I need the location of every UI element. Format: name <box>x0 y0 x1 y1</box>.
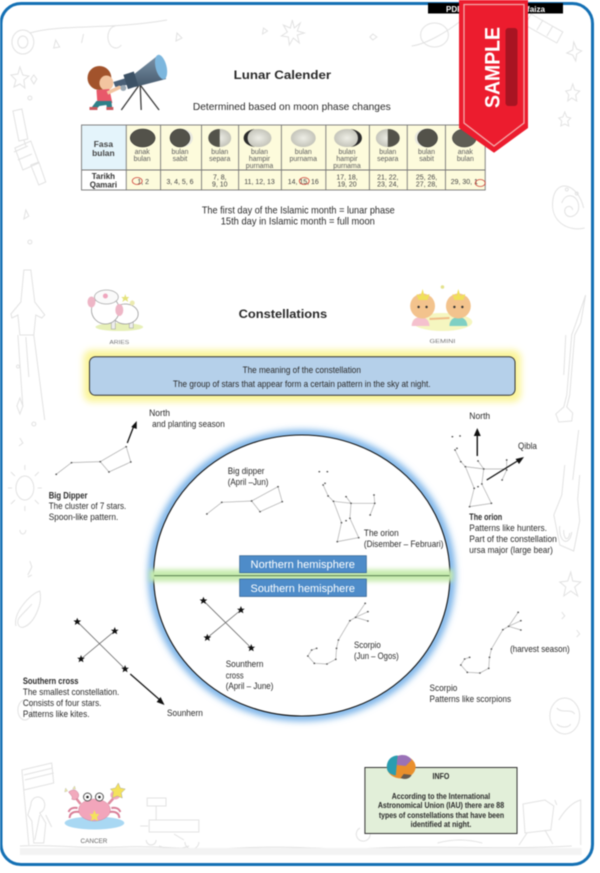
label: north and qibla <box>469 411 537 451</box>
label: Aries: ARIES <box>109 340 130 346</box>
dark red tag <box>506 28 518 106</box>
phase names: purnama <box>246 163 273 170</box>
text: first and fifteenth day <box>202 205 395 228</box>
phase names <box>134 149 474 170</box>
label: inner Southern cross: Sounthern <box>226 659 263 669</box>
diagram: celestial sphere <box>149 434 453 716</box>
label: inner Orion <box>364 528 443 549</box>
phase names: sabit <box>173 156 187 163</box>
text: Big Dipper description: The cluster of 7 stars. <box>49 501 126 511</box>
text: Southern cross description: Consists of four stars. <box>23 698 101 708</box>
phase names: bulan <box>251 149 268 156</box>
text: Southern cross description: Southern cross <box>23 676 79 686</box>
constellation: Southern cross inner <box>200 597 255 651</box>
lunar dates: 25, 26, <box>416 174 437 182</box>
phase names: hampir <box>249 156 271 163</box>
phase names: separa <box>377 156 399 163</box>
sample text: SAMPLE <box>482 27 504 108</box>
label: inner Big dipper <box>228 466 268 487</box>
sample ribbon <box>459 0 528 153</box>
table row label: Tarikh Qamari: Tarikh <box>92 172 115 181</box>
illustration: Gemini twins <box>410 285 472 331</box>
illustration: Cancer crab <box>65 783 125 830</box>
lunar dates: 1, 2 <box>137 179 149 186</box>
label: inner Scorpio: (Jun – Ogos) <box>354 651 399 661</box>
label: inner Scorpio <box>354 640 399 661</box>
label: north and planting season: and planting season <box>152 419 225 429</box>
text: Orion description <box>469 512 557 555</box>
lunar dates: 19, 20 <box>337 181 357 189</box>
arrow: north, Big Dipper <box>127 421 137 443</box>
text: Orion description: The orion <box>469 512 502 522</box>
constellation: Orion outer <box>451 435 508 507</box>
top black label bar <box>428 3 563 14</box>
lunar dates: 23, 24, <box>377 181 398 189</box>
lunar dates: 11, 12, 13 <box>244 179 275 186</box>
lunar dates: 21, 22, <box>377 174 398 182</box>
label: north and planting season <box>149 408 225 429</box>
text: Orion description: Part of the constellation <box>469 534 557 544</box>
constellation: Big Dipper inner <box>206 486 283 515</box>
info heading: INFO <box>433 772 449 781</box>
text: Orion description: Patterns like hunters. <box>469 523 547 533</box>
text: Scorpio description <box>430 683 512 704</box>
phase names: anak <box>135 149 150 156</box>
phase names: separa <box>209 156 230 163</box>
text: Orion description: ursa major (large bear) <box>469 545 553 555</box>
icon: brain <box>387 755 416 779</box>
label: inner Southern cross <box>226 659 273 691</box>
phase names: bulan <box>339 149 356 156</box>
label: Southern hemisphere <box>240 579 366 596</box>
label: inner Southern cross: cross <box>226 670 244 681</box>
text: Southern cross description: The smallest constellation. <box>23 687 119 697</box>
phase names: bulan <box>134 156 151 163</box>
moon phase icons <box>130 129 476 147</box>
phase names: bulan <box>379 149 396 156</box>
table row label: Fasa bulan: bulan <box>92 148 115 158</box>
info text: types of constellations that have been <box>379 811 504 820</box>
phase names: purnama <box>333 163 361 170</box>
subtitle: moon phase changes: Determined based on moon phase changes <box>193 102 391 113</box>
title: Lunar Calender: Lunar Calender <box>234 68 331 82</box>
label: inner Big dipper: Big dipper <box>228 466 264 476</box>
text: first and fifteenth day: 15th day in Islamic month = full moon <box>221 216 375 228</box>
text: first and fifteenth day: The first day of the Islamic month = lunar phase <box>202 205 395 217</box>
label: north and qibla: North <box>469 411 490 421</box>
arrow: qibla, Orion <box>487 457 524 480</box>
label: harvest season: (harvest season) <box>510 644 570 654</box>
phase names: hampir <box>336 156 358 163</box>
text: Southern cross description <box>23 676 119 719</box>
definition text: The group of stars that appear form a certain pattern in the sky at night. <box>173 379 431 389</box>
phase names: bulan <box>211 149 228 156</box>
table row label: Fasa bulan: Fasa <box>94 139 113 149</box>
constellation: Orion inner <box>318 471 376 542</box>
panel: meaning of constellation <box>84 350 521 402</box>
lunar dates: 9, 10 <box>212 181 228 189</box>
constellation: Big Dipper outer <box>55 446 132 475</box>
table: lunar phases <box>82 125 485 190</box>
table row label: Tarikh Qamari: Qamari <box>90 180 117 190</box>
phase names: purnama <box>290 156 317 163</box>
arrow: north, Orion <box>474 428 481 456</box>
title: Constellations: Constellations <box>239 307 327 321</box>
label: Gemini: GEMINI <box>430 339 456 345</box>
lunar dates: 7, 8, <box>213 174 227 182</box>
lunar dates: 14, 15, 16 <box>288 179 319 186</box>
phase names: anak <box>458 149 473 156</box>
label: north and planting season: North <box>149 408 170 418</box>
top black label bar: faiza <box>527 5 546 14</box>
label: Southern hemisphere: Southern hemisphere <box>251 583 355 595</box>
constellation: Scorpio inner <box>307 603 369 665</box>
label: inner Big dipper: (April –Jun) <box>228 477 268 487</box>
text: Scorpio description: Scorpio <box>430 683 457 693</box>
illustration: child with telescope <box>87 54 169 110</box>
illustration: Aries sheep <box>87 290 143 331</box>
lunar dates: 29, 30, 1 <box>451 179 478 186</box>
label: Cancer: CANCER <box>81 838 108 845</box>
phase names: bulan <box>418 149 435 156</box>
lunar dates <box>132 174 485 189</box>
info text <box>378 792 505 829</box>
definition heading: The meaning of the constellation <box>243 365 361 375</box>
top black label bar: PDF <box>446 5 462 14</box>
text: Big Dipper description <box>49 490 126 522</box>
phase names: bulan <box>457 156 474 163</box>
text: Southern cross description: Patterns like kites. <box>23 709 89 719</box>
label: south: Sounhern <box>167 708 203 718</box>
lunar dates: 17, 18, <box>336 174 358 182</box>
lunar dates: 27, 28, <box>416 181 437 189</box>
label: Northern hemisphere: Northern hemisphere <box>251 559 355 571</box>
info text: According to the International <box>392 792 490 801</box>
label: inner Orion: The orion <box>364 528 399 538</box>
label: north and qibla: Qibla <box>518 441 537 451</box>
panel: info box <box>365 755 517 834</box>
text: Big Dipper description: Big Dipper <box>49 490 88 501</box>
phase names: bulan <box>295 149 312 156</box>
text: Big Dipper description: Spoon-like pattern. <box>49 512 118 522</box>
constellation: Scorpio outer <box>460 612 522 674</box>
arrow: south <box>130 674 165 705</box>
label: inner Scorpio: Scorpio <box>354 640 381 650</box>
ground strip <box>20 848 582 855</box>
label: inner Southern cross: (April – June) <box>226 681 273 691</box>
label: inner Orion: (Disember – Februari) <box>364 539 443 549</box>
lunar dates: 3, 4, 5, 6 <box>166 179 194 186</box>
info text: identified at night. <box>411 820 471 829</box>
phase names: bulan <box>171 149 188 156</box>
phase names: sabit <box>419 156 434 163</box>
text: Scorpio description: Patterns like scorpions <box>430 694 512 704</box>
constellation: Southern cross outer <box>73 618 129 672</box>
label: Northern hemisphere <box>240 556 366 573</box>
info text: Astronomical Union (IAU) there are 88 <box>378 801 505 810</box>
